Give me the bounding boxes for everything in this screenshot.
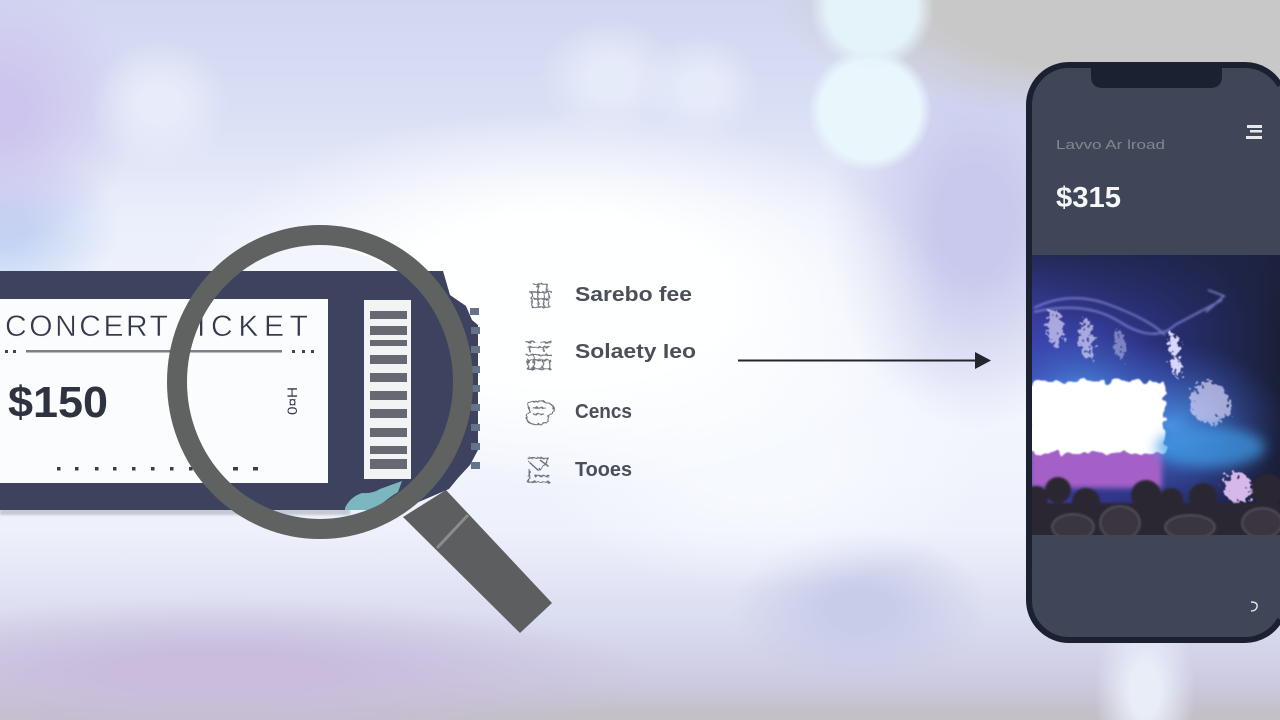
stage light wisps: [1034, 290, 1224, 335]
icon: fee 4: [527, 458, 550, 482]
menu icon: [1246, 125, 1262, 139]
ticket white panel: [0, 299, 328, 483]
icon: fee 3: [526, 401, 554, 424]
teal tear in ticket: [345, 481, 402, 510]
label: fee 2: Solaety Ieo: [575, 340, 696, 363]
phone light in crowd: [1224, 473, 1252, 503]
stage white light: [1030, 381, 1165, 453]
icon: fee 2: [526, 342, 552, 369]
ticket drop shadow: [0, 508, 350, 515]
ticket title continuation: ICKET: [197, 310, 308, 343]
dotted row: [57, 467, 258, 470]
ticket body: [0, 271, 478, 510]
phone: [1026, 62, 1280, 643]
barcode: [364, 300, 411, 479]
crowd: [1024, 474, 1280, 539]
ticket title: CONCERT: [5, 310, 168, 343]
phone back glyph: [1251, 602, 1257, 611]
divider line with dots: [5, 350, 314, 353]
fee item 2: [526, 340, 696, 369]
fee item 4: [527, 458, 632, 482]
magnifier ring: [177, 235, 463, 529]
fee item 3: [526, 400, 632, 424]
label: fee 3: Cencs: [575, 400, 632, 423]
phone frame: [1029, 65, 1280, 640]
magnifier handle: [403, 490, 552, 633]
small rotated code: 0¤H: [284, 387, 300, 415]
torn perforated edge: [470, 308, 480, 469]
phone notch: [1091, 66, 1222, 88]
lens glare and inner shadow: [346, 255, 394, 271]
phone price: $315: [1056, 182, 1121, 214]
concert photo: [1032, 255, 1280, 535]
phone body: [1029, 65, 1280, 640]
arrow: [738, 352, 991, 369]
label: fee 1: Sarebo fee: [575, 283, 692, 306]
label: fee 4: Tooes: [575, 458, 632, 481]
concert ticket: [0, 271, 480, 515]
handle band: [437, 515, 468, 548]
magnifying glass: [177, 235, 552, 633]
phone caption: Lavvo Ar lroad: [1056, 138, 1165, 152]
fee list: [526, 283, 696, 482]
fee item 1: [529, 283, 692, 307]
purple crowd glow: [1030, 448, 1162, 488]
icon: fee 1: [529, 284, 552, 307]
ticket price: $150: [8, 378, 108, 427]
